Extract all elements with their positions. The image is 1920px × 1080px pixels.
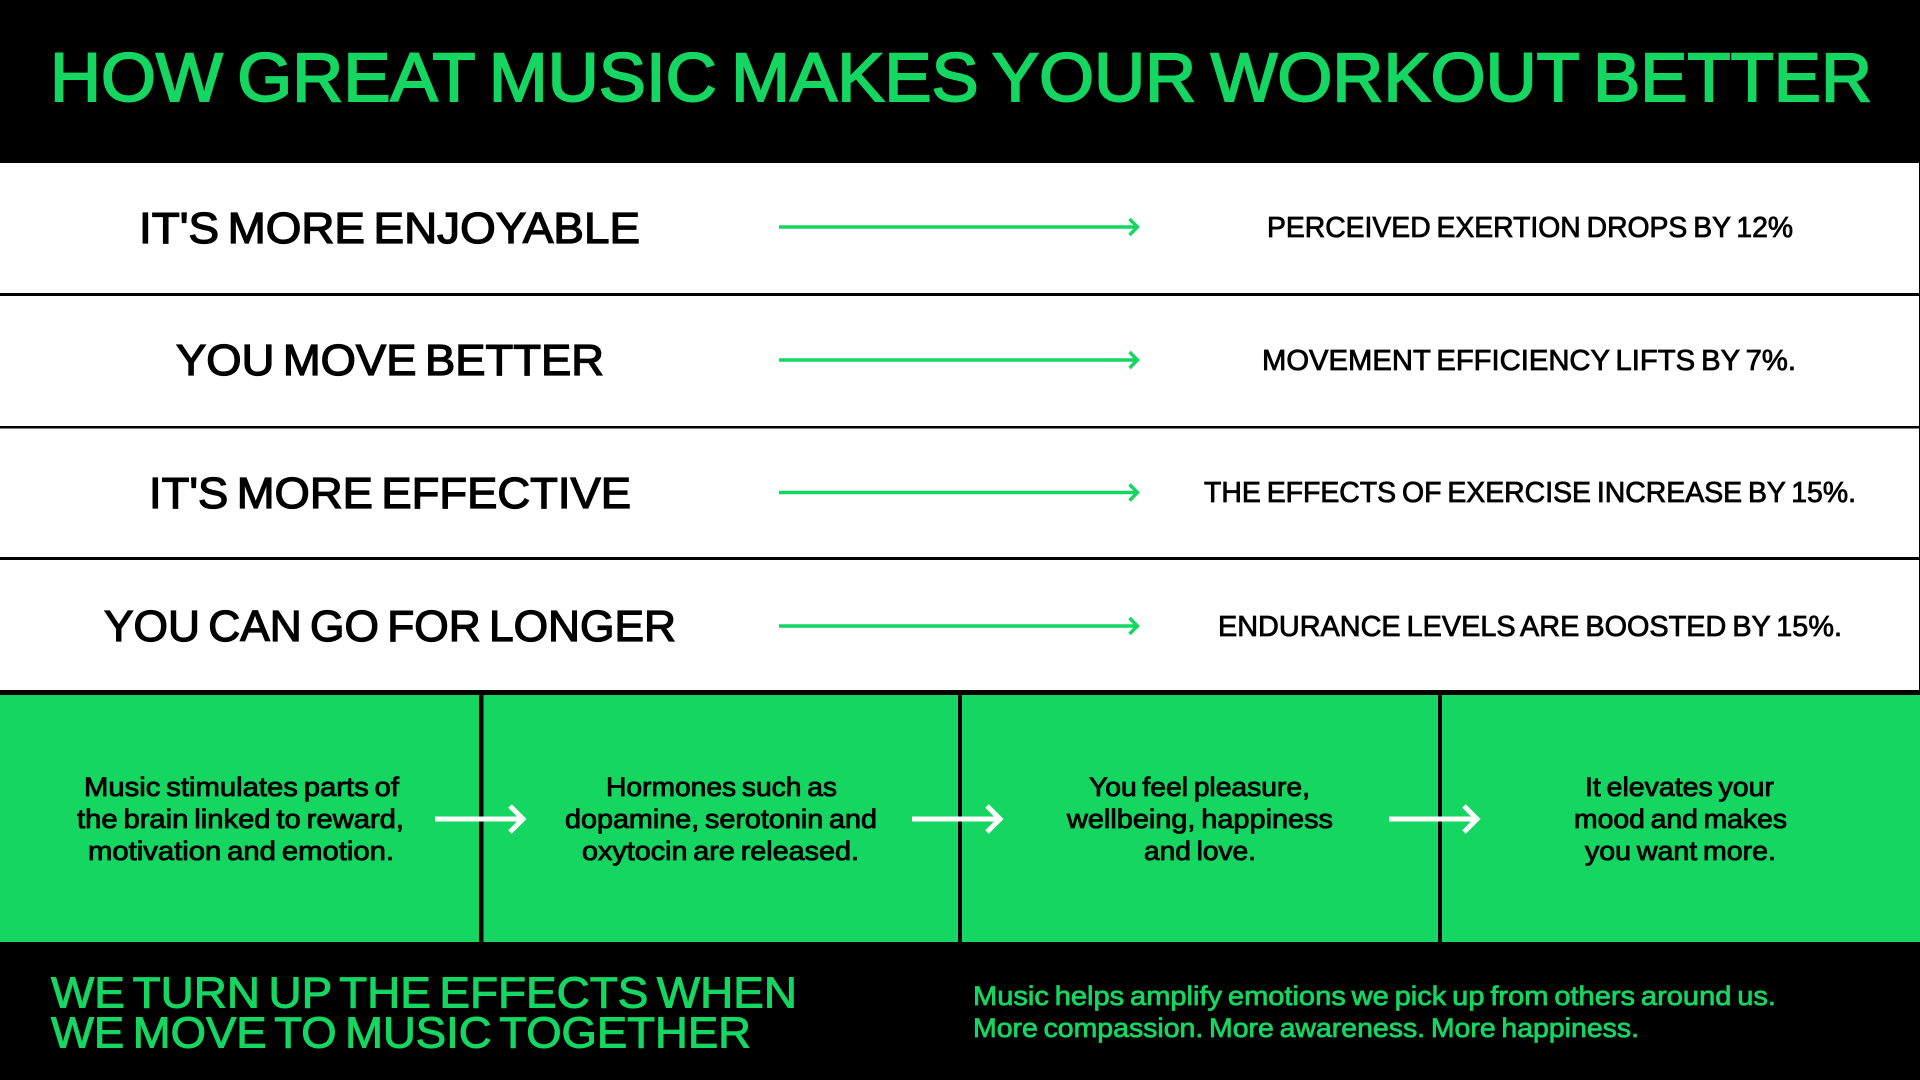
row 4: go for longer: YOU CAN GO FOR LONGER: [104, 602, 676, 651]
step 2: [484, 695, 958, 942]
footer text: Music helps amplify emotions we pick up from others around us.: [973, 981, 1776, 1011]
row 4: go for longer: ENDURANCE LEVELS ARE BOOSTED BY 15%.: [1218, 611, 1842, 643]
row 1: enjoyable: [139, 204, 1793, 253]
step 2: dopamine, serotonin and: [565, 804, 877, 834]
row 2: move better: MOVEMENT EFFICIENCY LIFTS BY 7%.: [1262, 345, 1796, 377]
step 3: and love.: [1144, 836, 1256, 866]
row 2: move better: YOU MOVE BETTER: [176, 336, 604, 385]
row 1: enjoyable: IT'S MORE ENJOYABLE: [139, 204, 640, 253]
panel: music effect chain: [0, 695, 1920, 942]
step 3: wellbeing, happiness: [1066, 804, 1333, 834]
step 2: Hormones such as: [606, 772, 837, 802]
arrow: step 2 to 3: [912, 806, 1000, 832]
step 1: [0, 695, 479, 942]
footer heading: WE MOVE TO MUSIC TOGETHER: [51, 1008, 751, 1058]
row 2: move better: [176, 336, 1796, 385]
arrow: step 3 to 4: [1389, 806, 1477, 832]
step 2: oxytocin are released.: [582, 836, 859, 866]
footer heading: WE TURN UP THE EFFECTS WHEN: [51, 968, 797, 1018]
footer text: More compassion. More awareness. More happiness.: [973, 1013, 1639, 1043]
row 3: more effective: IT'S MORE EFFECTIVE: [149, 469, 631, 518]
step 4: [1442, 695, 1920, 942]
step 1: the brain linked to reward,: [77, 804, 404, 834]
step 3: [962, 695, 1438, 942]
step 1: Music stimulates parts of: [84, 772, 400, 802]
arrow: step 1 to 2: [435, 806, 523, 832]
step 3: You feel pleasure,: [1089, 772, 1310, 802]
row 4: go for longer: [104, 602, 1842, 651]
footer text: [973, 981, 1776, 1043]
step 4: mood and makes: [1574, 804, 1787, 834]
title: HOW GREAT MUSIC MAKES YOUR WORKOUT BETTER: [50, 39, 1872, 116]
step 4: It elevates your: [1585, 772, 1774, 802]
step 1: motivation and emotion.: [88, 836, 394, 866]
footer heading: [51, 968, 797, 1058]
row 3: more effective: [149, 469, 1856, 518]
row 3: more effective: THE EFFECTS OF EXERCISE INCREASE BY 15%.: [1204, 477, 1856, 509]
step 4: you want more.: [1585, 836, 1776, 866]
panel: benefits table: [0, 163, 1919, 690]
row 1: enjoyable: PERCEIVED EXERTION DROPS BY 12%: [1267, 212, 1793, 244]
